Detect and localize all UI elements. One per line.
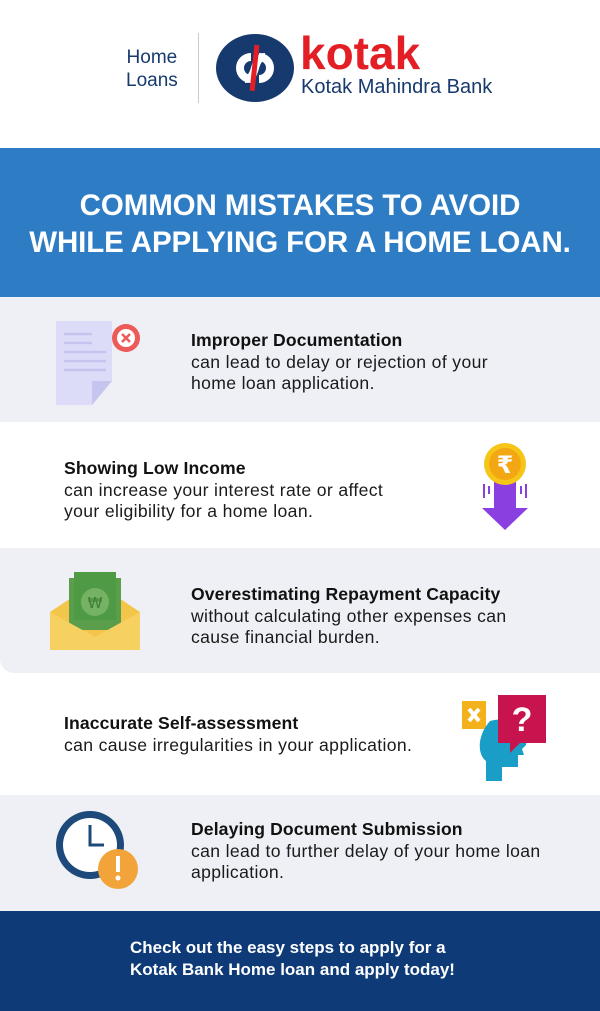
panel: delaying submission	[0, 795, 600, 911]
header logo	[126, 27, 492, 103]
text block: home loan application.	[191, 373, 375, 393]
icon: coin down arrow	[482, 443, 528, 530]
icon: document with x	[56, 321, 140, 405]
footer call to action	[0, 911, 600, 1011]
home loans label: Loans	[126, 70, 178, 91]
title text	[29, 189, 571, 259]
panel: overestimating repayment	[0, 548, 600, 673]
panel: low income	[0, 422, 600, 548]
home loans label	[126, 47, 178, 91]
text block: Overestimating Repayment Capacity	[191, 584, 500, 604]
footer text: Check out the easy steps to apply for a	[130, 938, 446, 957]
panel: improper documentation	[0, 297, 600, 422]
text block	[64, 458, 383, 521]
text block: can lead to delay or rejection of your	[191, 352, 488, 372]
icon: coin down arrow: ₹	[497, 451, 513, 479]
text block: Inaccurate Self-assessment	[64, 713, 298, 733]
text block	[64, 713, 412, 754]
header logo: Kotak Mahindra Bank	[301, 76, 492, 98]
text block	[191, 330, 488, 393]
footer text	[130, 938, 455, 979]
panel: inaccurate self-assessment	[0, 673, 600, 795]
text block	[191, 584, 507, 647]
home loans label: Home	[127, 47, 177, 68]
text block	[191, 819, 541, 882]
icon: head with question	[462, 695, 546, 781]
text block: cause financial burden.	[191, 627, 380, 647]
title text: WHILE APPLYING FOR A HOME LOAN.	[29, 226, 571, 259]
text block: Showing Low Income	[64, 458, 246, 478]
icon: envelope with money: ₩	[88, 594, 103, 612]
text block: without calculating other expenses can	[191, 606, 507, 626]
kotak wordmark: kotak	[300, 27, 420, 79]
footer text: Kotak Bank Home loan and apply today!	[130, 960, 455, 979]
title text: COMMON MISTAKES TO AVOID	[80, 189, 520, 222]
text block: Delaying Document Submission	[191, 819, 463, 839]
title banner	[0, 148, 600, 297]
text block: can increase your interest rate or affect	[64, 480, 383, 500]
kotak logo mark	[216, 34, 294, 102]
icon: head with question: ?	[512, 701, 532, 739]
text block: application.	[191, 862, 284, 882]
text block: can lead to further delay of your home loan	[191, 840, 541, 860]
text block: Improper Documentation	[191, 330, 402, 350]
text block: your eligibility for a home loan.	[64, 501, 313, 521]
icon: clock with alert	[56, 811, 138, 889]
icon: envelope with money	[50, 572, 140, 650]
text block: can cause irregularities in your application.	[64, 734, 412, 754]
